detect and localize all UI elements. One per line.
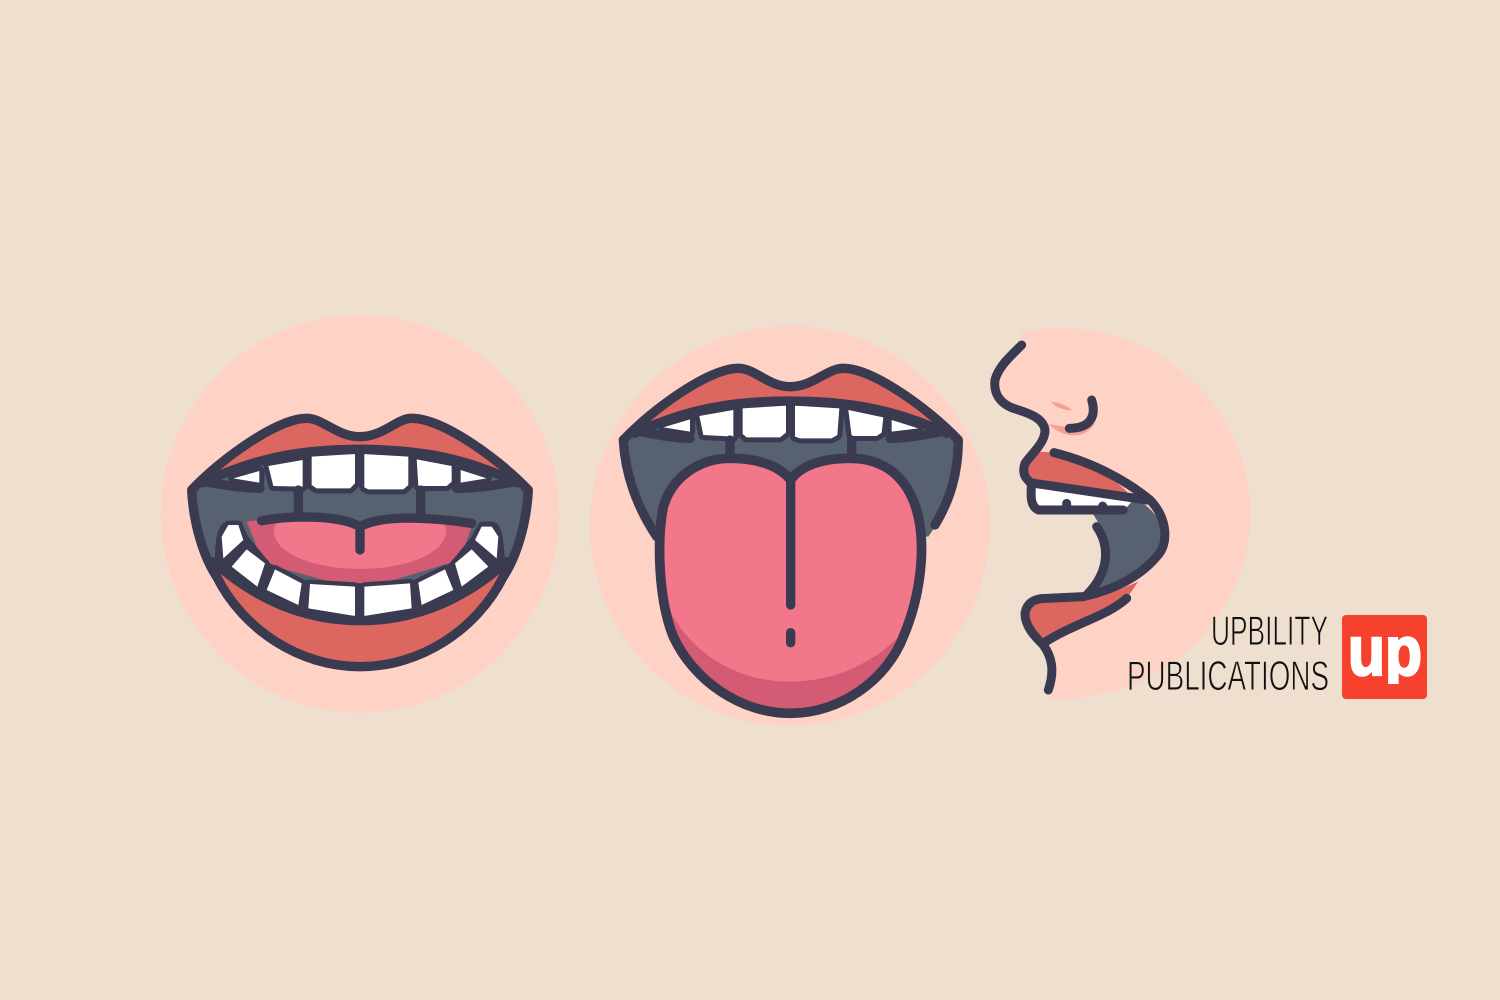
nose highlight — [1051, 402, 1072, 411]
inner mouth — [1083, 493, 1165, 597]
teeth — [1035, 487, 1132, 507]
icon: mouth in side profile — [990, 328, 1250, 698]
lower teeth — [222, 525, 498, 616]
background circle: open mouth — [161, 315, 559, 713]
background circle: tongue — [590, 326, 990, 726]
tongue body — [654, 454, 926, 718]
upper lip — [1026, 452, 1128, 493]
tongue — [246, 520, 471, 584]
lower lip — [220, 574, 500, 662]
upper teeth — [663, 406, 918, 438]
nostril shading — [1048, 419, 1097, 435]
logo badge: up — [1348, 612, 1422, 690]
lower gum band — [215, 522, 505, 621]
lip and gum line work — [623, 368, 958, 537]
icon: mouth with tongue out — [590, 326, 990, 726]
upper teeth — [233, 454, 487, 489]
profile line work — [995, 345, 1165, 690]
background circle: profile — [1000, 328, 1250, 698]
tongue dot — [777, 633, 805, 643]
logo: Upbility Publications — [1127, 607, 1427, 699]
illustration canvas — [161, 315, 1427, 726]
mouth line work — [192, 418, 528, 667]
icon: open mouth with teeth — [161, 315, 559, 713]
tongue out drawing — [623, 340, 958, 713]
upper lip — [220, 423, 500, 470]
open mouth drawing — [187, 414, 533, 672]
profile drawing — [995, 345, 1165, 690]
logo wordmark: PUBLICATIONS — [1127, 652, 1329, 699]
lower lip — [1025, 582, 1138, 643]
mouth interior — [192, 418, 528, 667]
upper lip — [650, 373, 932, 422]
mouth interior — [623, 368, 958, 537]
logo wordmark — [1127, 607, 1329, 699]
tongue centre groove — [777, 480, 805, 605]
logo wordmark: UPBILITY — [1211, 607, 1328, 654]
